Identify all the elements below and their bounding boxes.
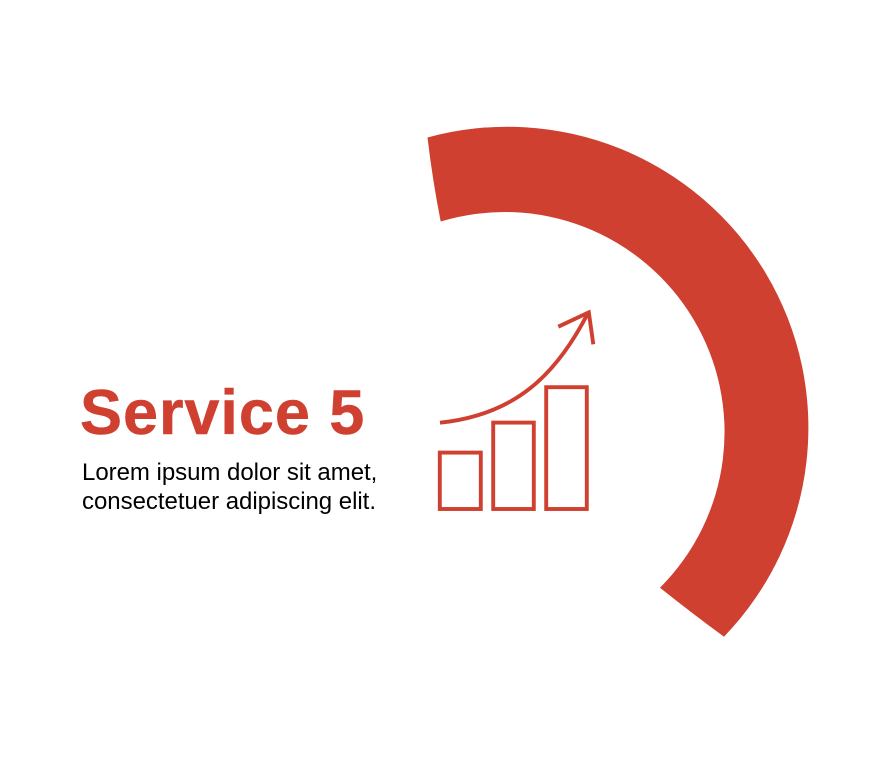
description text <box>82 459 377 514</box>
description text: Lorem ipsum dolor sit amet, <box>82 459 377 486</box>
description text: consectetuer adipiscing elit. <box>82 488 376 514</box>
bar 3 <box>546 387 587 509</box>
icon: growth bar chart <box>440 312 593 509</box>
bar 1 <box>440 453 481 509</box>
heading: Service 5 <box>80 378 365 448</box>
bar 2 <box>493 423 534 509</box>
arrow <box>440 312 593 423</box>
arc segment <box>428 127 808 637</box>
